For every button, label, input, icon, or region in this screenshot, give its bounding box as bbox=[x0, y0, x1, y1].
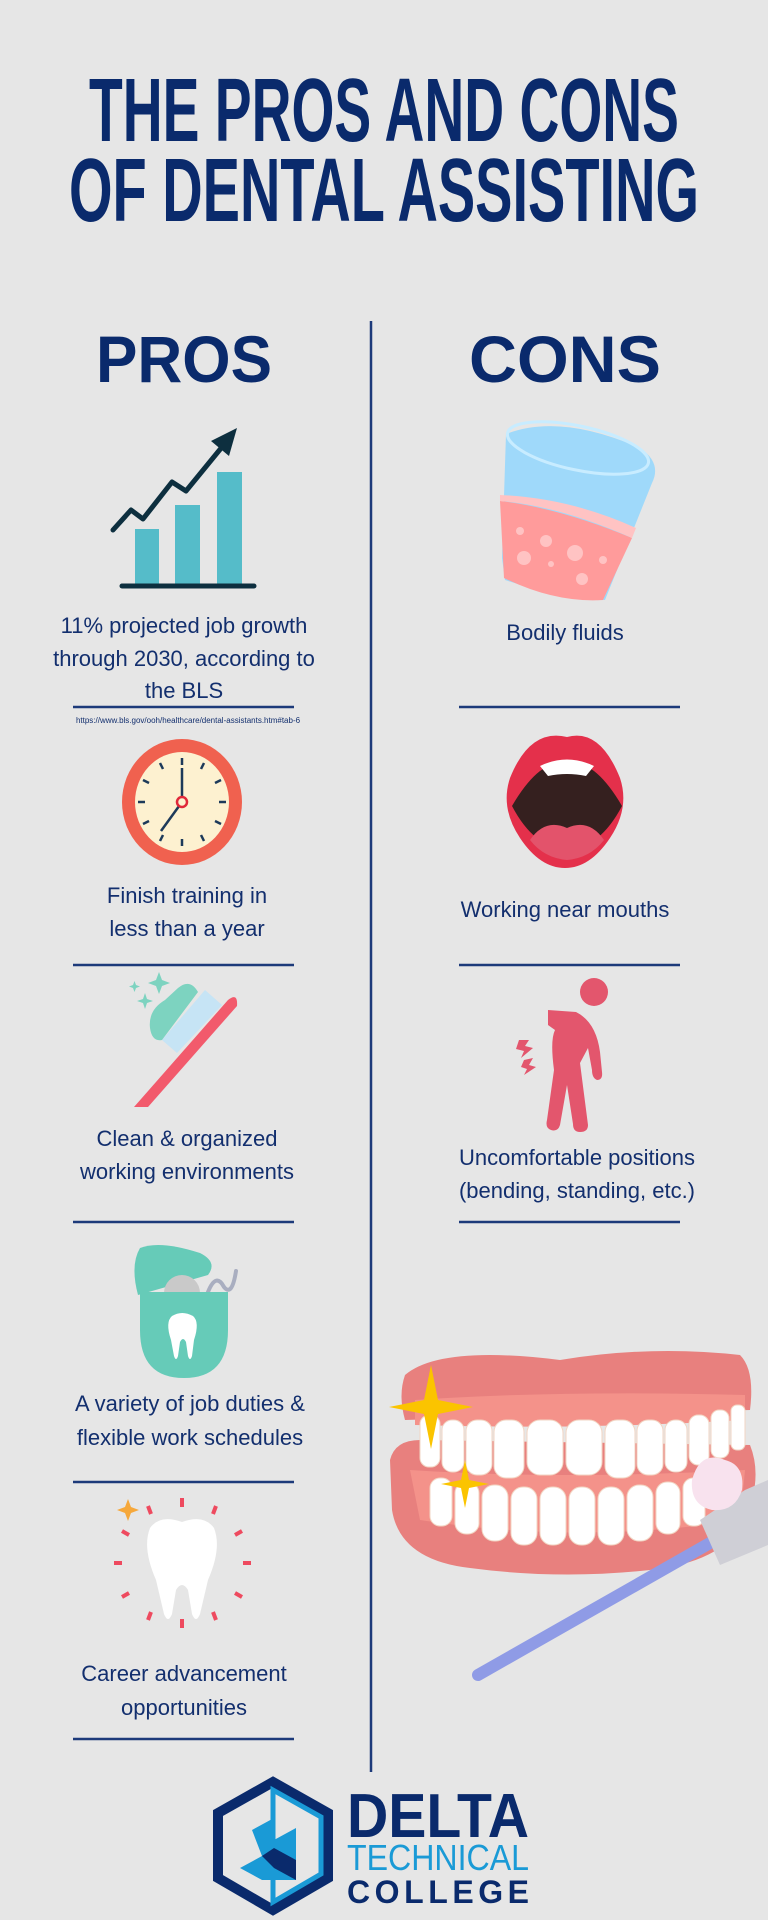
icon: open mouth bbox=[507, 736, 623, 868]
text: finish training bbox=[107, 883, 267, 941]
logo: Delta Technical College bbox=[218, 1782, 529, 1910]
text: job growth: 11% projected job growth bbox=[61, 613, 307, 638]
text: finish training: Finish training in bbox=[107, 883, 267, 908]
logo: Delta Technical College: DELTA bbox=[347, 1782, 529, 1851]
text: job duties bbox=[75, 1391, 305, 1450]
icon: sparkling tooth bbox=[114, 1498, 251, 1628]
heading: pros: PROS bbox=[96, 322, 272, 396]
icon: clock bbox=[122, 739, 242, 865]
text: uncomfortable positions: (bending, standing, etc.) bbox=[459, 1178, 695, 1203]
text: clean environments: Clean & organized bbox=[96, 1126, 278, 1151]
heading: cons: CONS bbox=[469, 322, 661, 396]
text: clean environments bbox=[79, 1126, 294, 1184]
icon: growth chart bbox=[113, 428, 254, 586]
icon: glass of fluid bbox=[500, 412, 655, 600]
icon: person with back pain bbox=[516, 978, 608, 1132]
text: finish training: less than a year bbox=[109, 916, 265, 941]
text: job growth: the BLS bbox=[145, 678, 223, 703]
icon: floss bbox=[134, 1245, 236, 1378]
text: job growth bbox=[53, 613, 315, 703]
text: uncomfortable positions: Uncomfortable positions bbox=[459, 1145, 695, 1170]
text: job growth: through 2030, according to bbox=[53, 646, 315, 671]
text: clean environments: working environments bbox=[79, 1159, 294, 1184]
text: uncomfortable positions bbox=[459, 1145, 695, 1203]
text: working near mouths: Working near mouths bbox=[461, 897, 669, 922]
text: career advancement: opportunities bbox=[121, 1695, 247, 1720]
icon: toothbrush bbox=[129, 972, 237, 1107]
logo: Delta Technical College: TECHNICAL bbox=[347, 1837, 529, 1878]
text: job duties: A variety of job duties & bbox=[75, 1391, 305, 1416]
text: career advancement bbox=[81, 1661, 287, 1720]
text: job duties: flexible work schedules bbox=[77, 1425, 303, 1450]
text: bodily fluids: Bodily fluids bbox=[506, 620, 624, 645]
text: career advancement: Career advancement bbox=[81, 1661, 287, 1686]
text: source url: https://www.bls.gov/ooh/healthcare/dental-assistants.htm#tab-6 bbox=[76, 716, 301, 725]
illustration: teeth with toothbrush bbox=[389, 1351, 768, 1675]
title bbox=[69, 61, 699, 241]
logo: Delta Technical College: COLLEGE bbox=[347, 1874, 529, 1910]
